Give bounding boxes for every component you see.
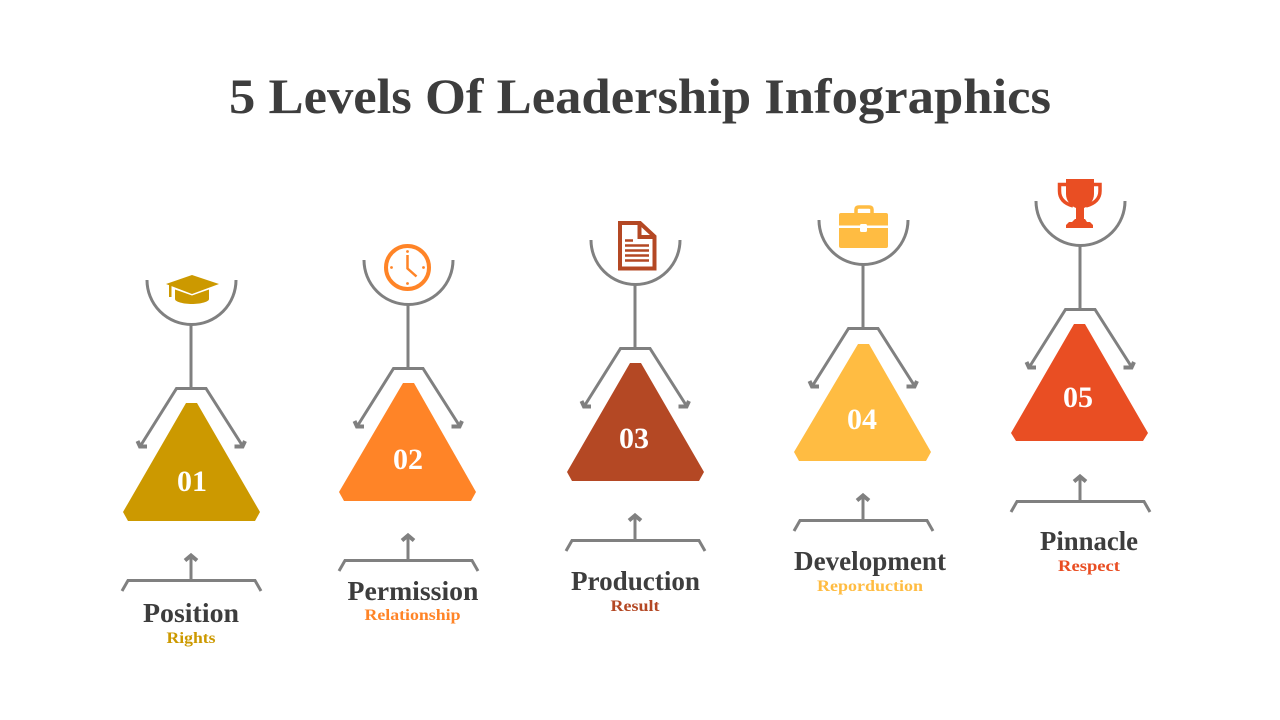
connector figure 1 bbox=[122, 280, 261, 591]
connector figure 5 bbox=[1011, 201, 1150, 512]
label: Production: Production bbox=[571, 566, 700, 596]
triangle 2 bbox=[339, 383, 476, 501]
sublabel: Reporduction: Reporduction bbox=[817, 578, 923, 595]
sublabel: Result: Result bbox=[610, 598, 660, 615]
icon: briefcase bbox=[839, 207, 888, 248]
sublabel: Rights: Rights bbox=[166, 630, 216, 647]
triangle 5 bbox=[1011, 324, 1148, 441]
connector figure 4 bbox=[794, 220, 933, 531]
sublabel: Relationship: Relationship bbox=[364, 607, 461, 624]
icon: document bbox=[620, 223, 654, 268]
icon: clock bbox=[386, 246, 429, 289]
level 1: position bbox=[122, 275, 261, 647]
number 04: 04 bbox=[847, 403, 877, 436]
number 03: 03 bbox=[619, 422, 649, 455]
label: Position: Position bbox=[143, 598, 239, 628]
level 5: pinnacle bbox=[1011, 179, 1150, 575]
number 05: 05 bbox=[1063, 381, 1093, 414]
connector figure 3 bbox=[566, 240, 705, 551]
sublabel: Respect: Respect bbox=[1058, 558, 1121, 575]
label: Pinnacle: Pinnacle bbox=[1040, 526, 1138, 556]
number 01: 01 bbox=[177, 465, 207, 498]
level 4: development bbox=[794, 207, 946, 595]
triangle 3 bbox=[567, 363, 704, 481]
label: Permission: Permission bbox=[348, 576, 478, 606]
title: 5 Levels Of Leadership Infographics bbox=[229, 68, 1051, 124]
number 02: 02 bbox=[393, 443, 423, 476]
label: Development: Development bbox=[794, 546, 946, 576]
level 3: production bbox=[566, 223, 705, 615]
triangle 1 bbox=[123, 403, 260, 521]
icon: trophy bbox=[1060, 179, 1100, 228]
triangle 4 bbox=[794, 344, 931, 461]
level 2: permission bbox=[339, 246, 478, 624]
icon: graduation cap bbox=[166, 275, 219, 304]
connector figure 2 bbox=[339, 260, 478, 571]
